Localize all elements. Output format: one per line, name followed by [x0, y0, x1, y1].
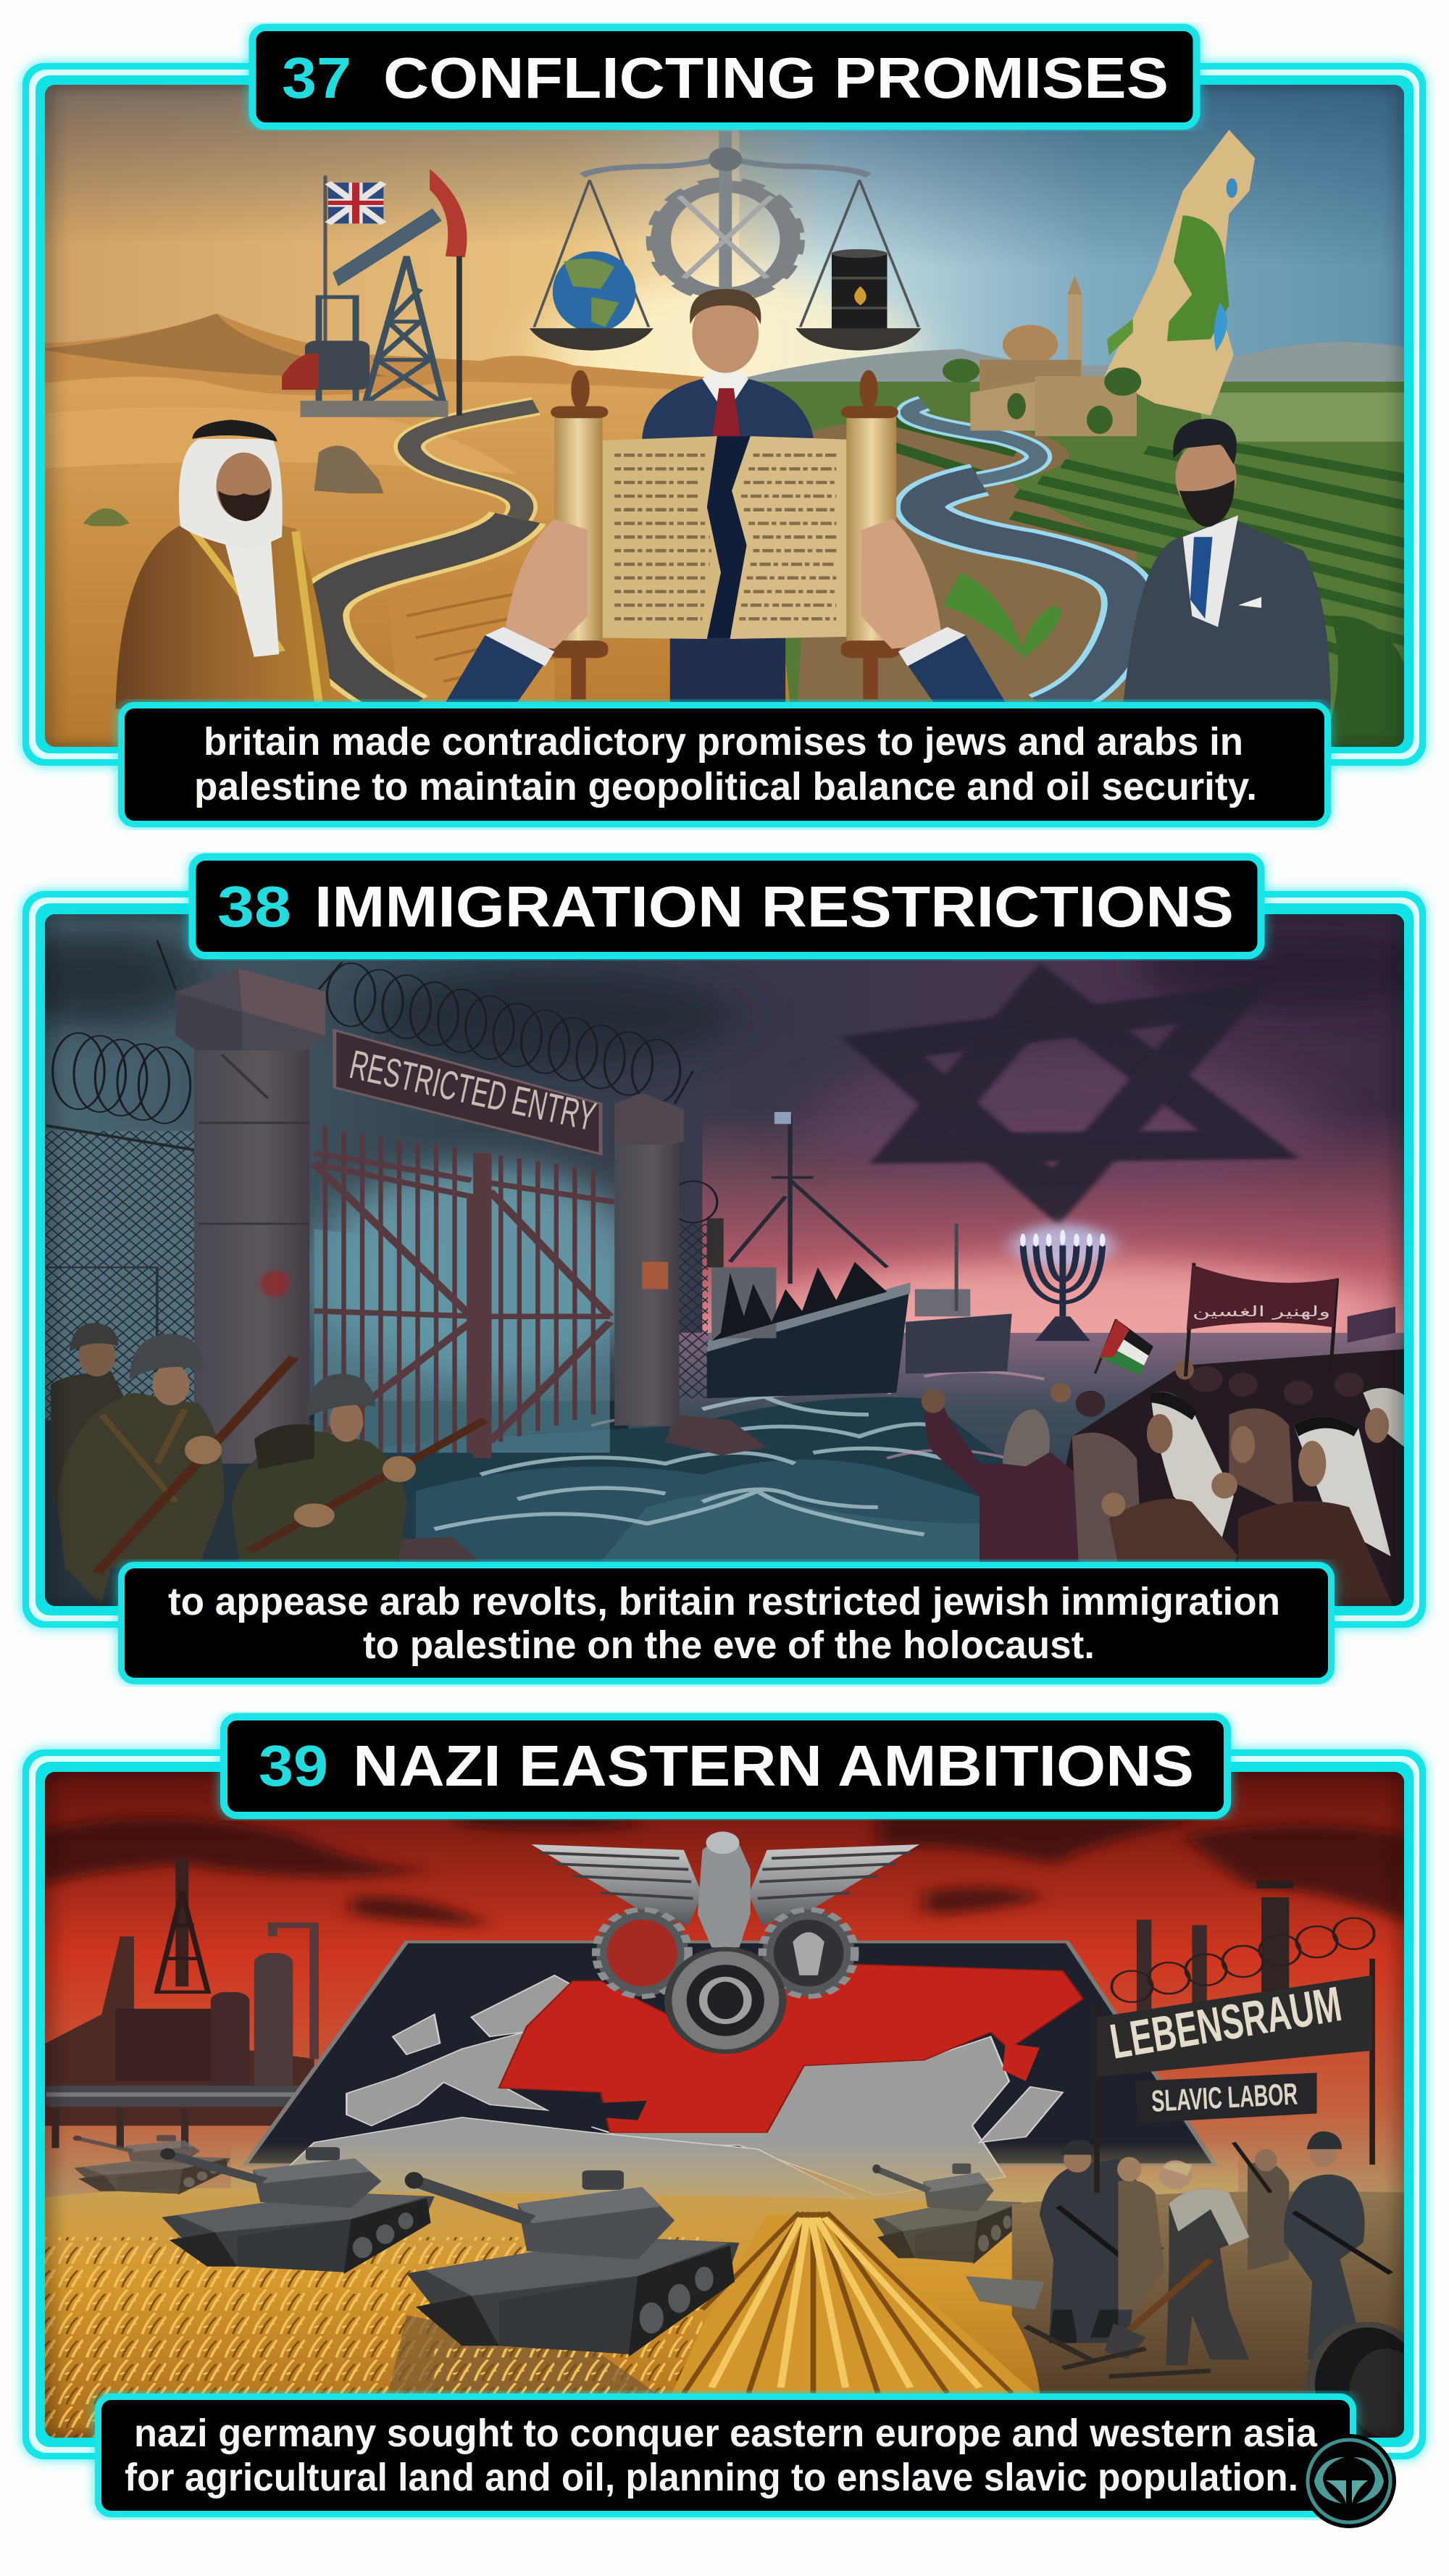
- sky: [45, 85, 1404, 377]
- caption: 37: britain made contradictory promises to jews and arabs in: [204, 720, 1243, 764]
- far tank: [73, 2135, 230, 2195]
- green farmland: [730, 342, 1423, 753]
- illustration: gate, ship and protest: [0, 911, 1449, 1616]
- banner text: lebensraum: LEBENSRAUM: [1106, 1976, 1345, 2070]
- chain-link fence: [37, 1126, 314, 1611]
- bearded man in suit: [1123, 419, 1331, 708]
- restricted entry sign text: RESTRICTED ENTRY: [346, 1041, 600, 1139]
- roads: [319, 403, 1129, 708]
- frame vignette: [44, 83, 1406, 748]
- panel: 38 immigration restrictions: [0, 857, 1449, 1681]
- immigrant ships: [707, 1112, 1012, 1398]
- caption: 39: [99, 2396, 1353, 2514]
- title: 37 conflicting promises: [252, 28, 1197, 126]
- title: 38 immigration restrictions: IMMIGRATION RESTRICTIONS: [314, 874, 1234, 939]
- title: 39 nazi eastern ambitions: NAZI EASTERN AMBITIONS: [353, 1734, 1194, 1798]
- soldiers: [51, 1323, 485, 1605]
- oil pump and union flag: [282, 169, 467, 417]
- balance scale with gear, globe and barrel: [530, 131, 922, 351]
- arab figure: [115, 420, 333, 708]
- menorah: [1012, 1224, 1114, 1341]
- illustration: desert and farmland scene: [37, 82, 1423, 753]
- lebensraum banners: [1097, 1959, 1372, 2193]
- title: 39 nazi eastern ambitions: 39: [259, 1734, 328, 1798]
- title: 39 nazi eastern ambitions: [224, 1717, 1227, 1815]
- stormy sea: [314, 1333, 1423, 1616]
- caption: 39: nazi germany sought to conquer eastern europe and western asia: [134, 2412, 1318, 2455]
- panel: 39 nazi eastern ambitions: [22, 1717, 1426, 2514]
- logo badge: [1302, 2434, 1396, 2528]
- torn scroll: [442, 370, 1009, 708]
- caption: 37: palestine to maintain geopolitical balance and oil security.: [194, 765, 1257, 808]
- protest banners: [1185, 1263, 1395, 1376]
- caption: 38: [122, 1565, 1332, 1681]
- protest banners: ولهنير الغسين: [1193, 1304, 1330, 1320]
- stormy sky: [0, 911, 1449, 1613]
- shadow star of david: [882, 990, 1249, 1197]
- wheat field: [37, 2188, 1049, 2449]
- panel: 37 conflicting promises: [22, 28, 1426, 824]
- illustration: war map, tanks and wheat: [37, 1769, 1425, 2454]
- mid tank: [160, 2147, 435, 2274]
- dirt ground: [1012, 2191, 1414, 2449]
- title: 37 conflicting promises: 37: [282, 46, 351, 110]
- caption: 38: to palestine on the eve of the holocaust.: [363, 1623, 1095, 1667]
- mosque town: [943, 275, 1141, 436]
- tanks: [73, 2135, 1023, 2357]
- title: 38 immigration restrictions: [193, 857, 1261, 955]
- palestine map: [1104, 130, 1255, 415]
- frame vignette: [44, 1771, 1406, 2438]
- red sky: [37, 1769, 1423, 2454]
- neon frame: [22, 891, 1426, 1628]
- central statesman: [642, 289, 813, 708]
- palestinian flag: [1095, 1319, 1153, 1376]
- caption: 37: [122, 706, 1327, 824]
- banner text: slavic labor: SLAVIC LABOR: [1151, 2076, 1298, 2118]
- oil refinery: [37, 1858, 314, 2148]
- right tank: [872, 2164, 1023, 2265]
- frame vignette: [44, 913, 1406, 1607]
- soldiers and forced labourers: [966, 2131, 1425, 2445]
- neon frame: [22, 1749, 1426, 2459]
- eagle emblem: [531, 1831, 919, 2052]
- far right towers and wire: [1111, 1881, 1374, 2015]
- arab protest crowd: [922, 1349, 1405, 1611]
- caption: 39: for agricultural land and oil, planning to enslave slavic population.: [125, 2456, 1298, 2499]
- front tank: [405, 2170, 739, 2357]
- central medallion: [668, 1949, 782, 2052]
- neon frame: [22, 63, 1426, 766]
- conquest map: [231, 1942, 1238, 2209]
- caption: 38: to appease arab revolts, britain restricted jewish immigration: [168, 1580, 1280, 1623]
- left and right medals: [596, 1910, 855, 1996]
- desert dunes: [37, 314, 813, 753]
- title: 38 immigration restrictions: 38: [217, 874, 291, 939]
- title: 37 conflicting promises: CONFLICTING PROMISES: [383, 46, 1169, 110]
- wall, barbed wire and gate: [53, 940, 717, 1463]
